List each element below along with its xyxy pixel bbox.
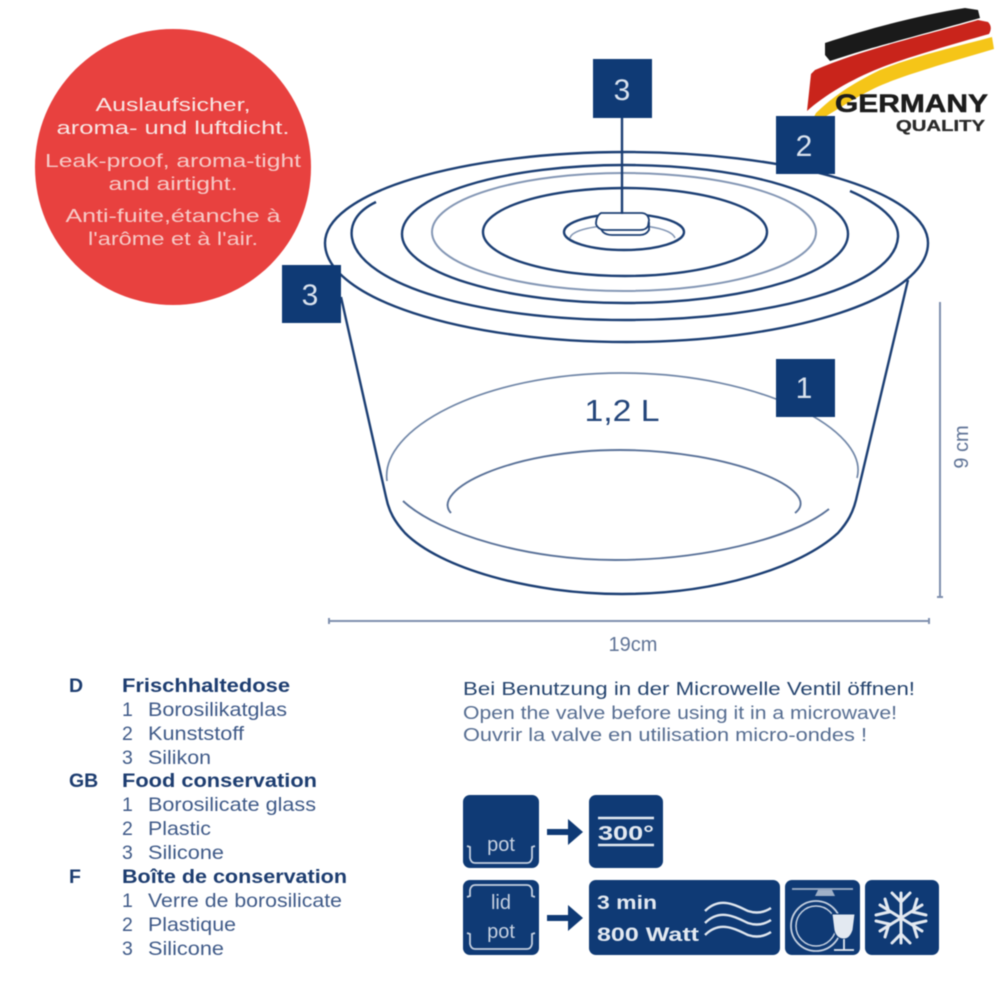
- German materials: Borosilikatglas: [148, 699, 287, 721]
- microwave valve instruction: [463, 678, 915, 745]
- red circle callout: and airtight.: [108, 173, 238, 194]
- Germany quality badge: GERMANY: [835, 90, 988, 118]
- Germany quality badge: [807, 8, 994, 135]
- lid rim arc: [352, 191, 898, 320]
- valve inner arc: [570, 225, 675, 238]
- marker 3 top: [593, 59, 652, 118]
- microwave valve instruction: Bei Benutzung in der Microwelle Ventil öffnen!: [463, 678, 915, 699]
- marker 1: [776, 359, 835, 417]
- English materials: Silicone: [148, 842, 224, 864]
- arrow: pot to oven: [547, 819, 583, 845]
- English materials: [69, 770, 317, 864]
- base plate arc: [448, 450, 801, 513]
- German materials: 2: [122, 723, 133, 745]
- icon: lid and pot: lid: [491, 892, 511, 914]
- icon: lid and pot: [463, 880, 539, 955]
- French materials: Silicone: [148, 938, 224, 960]
- container drawing: [325, 100, 928, 594]
- height dimension: [937, 302, 973, 597]
- arrow: lid and pot to microwave: [547, 905, 583, 931]
- marker 3 left: 3: [302, 279, 318, 312]
- French materials: Plastique: [148, 914, 236, 936]
- icon: freezer safe: [865, 880, 939, 955]
- German materials: Frischhaltedose: [122, 675, 290, 697]
- marker 2: 2: [796, 130, 812, 163]
- Germany quality badge: QUALITY: [896, 118, 985, 135]
- English materials: Food conservation: [122, 770, 317, 792]
- icon: 300 degrees: [589, 795, 663, 868]
- English materials: 2: [122, 818, 133, 840]
- leader line to valve: [621, 100, 623, 214]
- microwave valve instruction: Open the valve before using it in a microwave!: [463, 702, 897, 723]
- marker 3 top: 3: [614, 74, 630, 107]
- lid ring inner: [483, 188, 767, 276]
- French materials: [69, 866, 347, 960]
- icon: pot: pot: [487, 834, 515, 856]
- width dimension: [329, 618, 929, 656]
- French materials: 3: [122, 938, 133, 960]
- red circle callout: l'arôme et à l'air.: [88, 228, 258, 249]
- French materials: 2: [122, 914, 133, 936]
- lid ring light: [432, 173, 816, 291]
- valve ring: [564, 214, 684, 250]
- icon: dishwasher safe: [785, 880, 860, 955]
- French materials: Verre de borosilicate: [148, 890, 342, 912]
- German materials: D: [69, 675, 83, 697]
- German materials: Silikon: [148, 747, 211, 769]
- icon: 300 degrees: 300°: [598, 823, 654, 845]
- English materials: Plastic: [148, 818, 211, 840]
- capacity label: 1,2 L: [584, 393, 660, 428]
- red circle callout: [35, 29, 311, 305]
- German materials: 3: [122, 747, 133, 769]
- marker 2: [776, 116, 835, 174]
- red circle callout: aroma- und luftdicht.: [56, 117, 290, 138]
- lid outer edge: [325, 152, 928, 342]
- height dimension: 9 cm: [951, 425, 973, 469]
- icon: lid and pot: pot: [487, 921, 515, 943]
- English materials: GB: [69, 770, 98, 792]
- base lower arc: [403, 501, 829, 560]
- valve button: [596, 213, 649, 235]
- English materials: 3: [122, 842, 133, 864]
- French materials: F: [69, 866, 81, 888]
- materials legend: [69, 675, 347, 960]
- microwave valve instruction: Ouvrir la valve en utilisation micro-ondes !: [463, 724, 867, 745]
- glass body outline: [341, 280, 908, 594]
- English materials: 1: [122, 794, 133, 816]
- French materials: Boîte de conservation: [122, 866, 347, 888]
- red circle callout: Auslaufsicher,: [96, 94, 250, 115]
- English materials: Borosilicate glass: [148, 794, 316, 816]
- marker 1: 1: [796, 372, 812, 405]
- icon: pot: [463, 795, 539, 868]
- German materials: Kunststoff: [148, 723, 245, 745]
- French materials: 1: [122, 890, 133, 912]
- icon: microwave 3 min 800 watt: 800 Watt: [597, 925, 700, 946]
- lid ring outer: [402, 165, 848, 303]
- width dimension: 19cm: [609, 634, 657, 656]
- red circle callout: Anti-fuite,étanche à: [66, 205, 281, 226]
- icon: microwave 3 min 800 watt: [589, 880, 780, 955]
- marker 3 left: [282, 265, 341, 323]
- icon: microwave 3 min 800 watt: 3 min: [597, 893, 657, 914]
- German materials: [69, 675, 290, 769]
- red circle callout: Leak-proof, aroma-tight: [45, 150, 301, 171]
- German materials: 1: [122, 699, 133, 721]
- inner wall arc: [387, 373, 858, 481]
